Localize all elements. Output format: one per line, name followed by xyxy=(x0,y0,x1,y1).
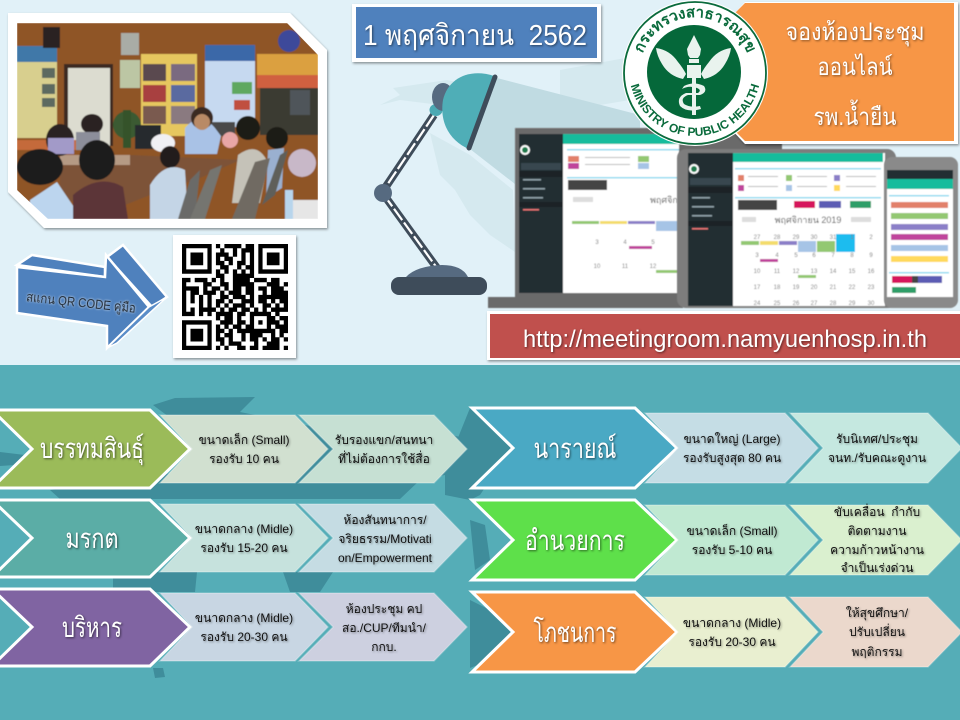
tablet content: 4 xyxy=(775,253,779,259)
tablet content: 31 xyxy=(830,235,837,241)
use text: จริยธรรม/Motivati xyxy=(338,532,432,546)
size text: รองรับ 10 คน xyxy=(209,452,279,466)
meeting photo xyxy=(17,23,318,219)
room use xyxy=(790,413,960,483)
use text: กกบ. xyxy=(371,640,397,654)
tablet content xyxy=(735,168,881,307)
use text: ที่ไม่ต้องการใช้สื่อ xyxy=(338,450,430,466)
size text: รองรับ 20-30 คน xyxy=(688,635,776,649)
room use xyxy=(790,597,960,667)
tablet content: 18 xyxy=(774,285,781,291)
tablet content: 10 xyxy=(754,269,761,275)
tablet content: 30 xyxy=(868,301,875,307)
laptop content: พฤศจิกายน xyxy=(650,195,694,205)
tablet content: 23 xyxy=(868,285,875,291)
tablet content: 1 xyxy=(850,235,854,241)
tablet content: 3 xyxy=(755,253,759,259)
phone mockup xyxy=(884,157,958,308)
use text: รับนิเทศ/ประชุม xyxy=(836,432,918,447)
logo inner disk xyxy=(647,25,741,119)
room row: Borihan xyxy=(0,589,467,666)
background: lower teal area xyxy=(0,365,960,720)
room use xyxy=(790,505,960,575)
tablet content: 28 xyxy=(830,301,837,307)
laptop content: 5 xyxy=(651,240,655,246)
laptop content xyxy=(567,149,694,273)
orange title text: จองห้องประชุม xyxy=(786,19,924,47)
use text: จำเป็นเร่งด่วน xyxy=(841,560,913,575)
room name: บริหาร xyxy=(62,612,122,643)
room name: บรรทมสินธุ์ xyxy=(40,433,144,466)
tablet mockup xyxy=(677,149,896,308)
size text: ขนาดเล็ก (Small) xyxy=(198,432,290,447)
use text: พฤติกรรม xyxy=(851,645,903,659)
phone list xyxy=(889,195,949,293)
logo caduceus xyxy=(656,35,731,115)
tablet content: 9 xyxy=(869,253,873,259)
use text: รับรองแขก/สนทนา xyxy=(335,433,433,447)
tablet content: 16 xyxy=(868,269,875,275)
room row: Narai xyxy=(472,408,960,488)
arrow label: สแกน QR CODE คู่มือ xyxy=(25,289,137,317)
logo English text: MINISTRY OF PUBLIC HEALTH xyxy=(630,84,759,136)
room size xyxy=(645,505,818,575)
lamp base xyxy=(406,265,468,277)
QR modules xyxy=(182,246,288,348)
date text: 1 พฤศจิกายน 2562 xyxy=(363,20,587,52)
size text: ขนาดเล็ก (Small) xyxy=(686,523,778,538)
size text: รองรับ 15-20 คน xyxy=(200,541,288,555)
laptop mockup xyxy=(488,128,782,308)
tablet content: 11 xyxy=(774,269,781,275)
tablet content: 15 xyxy=(849,269,856,275)
room name: นารายณ์ xyxy=(534,433,616,464)
size text: ขนาดกลาง (Midle) xyxy=(195,522,293,536)
room use xyxy=(299,415,467,483)
tablet content: 6 xyxy=(812,253,816,259)
lamp shade xyxy=(430,104,442,116)
laptop header xyxy=(563,134,683,144)
table xyxy=(60,155,240,205)
desk lamp xyxy=(374,73,495,295)
tablet sidebar xyxy=(688,153,733,306)
tablet content: 20 xyxy=(811,285,818,291)
room row: Borommasin xyxy=(0,410,467,488)
room row: Phochanakan xyxy=(472,592,960,672)
tablet content: 24 xyxy=(754,301,761,307)
logo Thai text: กระทรวงสาธารณสุข xyxy=(636,8,755,53)
tablet content: 13 xyxy=(811,269,818,275)
tablet content: พฤศจิกายน 2019 xyxy=(775,215,841,225)
laptop content: 12 xyxy=(650,264,657,270)
URL bar xyxy=(487,311,960,360)
laptop content: 10 xyxy=(594,264,601,270)
orange title text: ออนไลน์ xyxy=(818,53,893,81)
background: darker world map lower xyxy=(0,397,512,678)
tablet content: 25 xyxy=(774,301,781,307)
tablet content: 5 xyxy=(794,253,798,259)
laptop content: 4 xyxy=(623,240,627,246)
laptop sidebar xyxy=(519,134,563,293)
lamp joint xyxy=(374,184,392,202)
ministry logo xyxy=(622,0,768,146)
tablet content: 29 xyxy=(849,301,856,307)
tablet content: 27 xyxy=(754,235,761,241)
orange title text: รพ.น้ำยืน xyxy=(814,99,896,131)
photo frame xyxy=(8,13,327,228)
tablet content: 21 xyxy=(830,285,837,291)
use text: จนท./รับคณะดูงาน xyxy=(828,451,926,466)
room size xyxy=(645,597,818,667)
room size xyxy=(160,415,328,483)
tablet content: 29 xyxy=(793,235,800,241)
tablet content: 2 xyxy=(869,235,873,241)
use text: ติดตามงาน xyxy=(848,524,906,538)
people xyxy=(46,124,74,156)
tablet content: 19 xyxy=(793,285,800,291)
tablet content: 14 xyxy=(830,269,837,275)
laptop content: 3 xyxy=(595,240,599,246)
tablet content: 28 xyxy=(774,235,781,241)
tablet content: 8 xyxy=(850,253,854,259)
room size xyxy=(645,413,818,483)
use text: on/Empowerment xyxy=(338,551,433,565)
room name: อำนวยการ xyxy=(525,525,625,556)
laptop content: 11 xyxy=(622,264,629,270)
room row: Morakot xyxy=(0,500,467,577)
tablet content: 26 xyxy=(793,301,800,307)
size text: รองรับสูงสุด 80 คน xyxy=(683,451,781,466)
background: faint world map top xyxy=(380,58,630,252)
use text: ความก้าวหน้างาน xyxy=(830,543,924,557)
use text: ห้องประชุม คป xyxy=(346,602,422,617)
use text: ให้สุขศึกษา/ xyxy=(846,606,909,621)
orange title panel xyxy=(730,2,958,144)
room size xyxy=(160,593,328,661)
tablet content: 27 xyxy=(811,301,818,307)
size text: ขนาดกลาง (Midle) xyxy=(195,611,293,625)
URL text: http://meetingroom.namyuenhosp.in.th xyxy=(523,326,927,353)
room use xyxy=(299,593,467,661)
use text: ห้องสันทนาการ/ xyxy=(343,513,427,527)
room row: Amnuaykan xyxy=(472,500,960,580)
size text: ขนาดใหญ่ (Large) xyxy=(684,432,780,446)
room use xyxy=(299,504,467,572)
QR code xyxy=(173,235,296,358)
background: top light area xyxy=(0,0,960,365)
date box xyxy=(352,4,601,62)
phone header xyxy=(887,170,953,179)
use text: ขับเคลื่อน กำกับ xyxy=(834,503,920,519)
orange title text xyxy=(786,19,924,131)
room name: โภชนการ xyxy=(534,616,616,648)
room size xyxy=(160,504,328,572)
tablet header xyxy=(733,153,883,162)
size text: ขนาดกลาง (Midle) xyxy=(683,616,781,630)
light beam xyxy=(470,78,640,184)
use text: สอ./CUP/ทีมนำ/ xyxy=(342,621,427,635)
use text: ปรับเปลี่ยน xyxy=(849,623,905,639)
size text: รองรับ 20-30 คน xyxy=(200,630,288,644)
lamp arm xyxy=(383,115,437,268)
tablet content: 22 xyxy=(849,285,856,291)
room name: มรกต xyxy=(66,523,118,554)
tablet content: 17 xyxy=(754,285,761,291)
arrow: scan QR code xyxy=(17,245,167,348)
size text: รองรับ 5-10 คน xyxy=(692,543,772,557)
tablet content: 12 xyxy=(793,269,800,275)
tablet content: 7 xyxy=(831,253,835,259)
tablet content: 30 xyxy=(811,235,818,241)
